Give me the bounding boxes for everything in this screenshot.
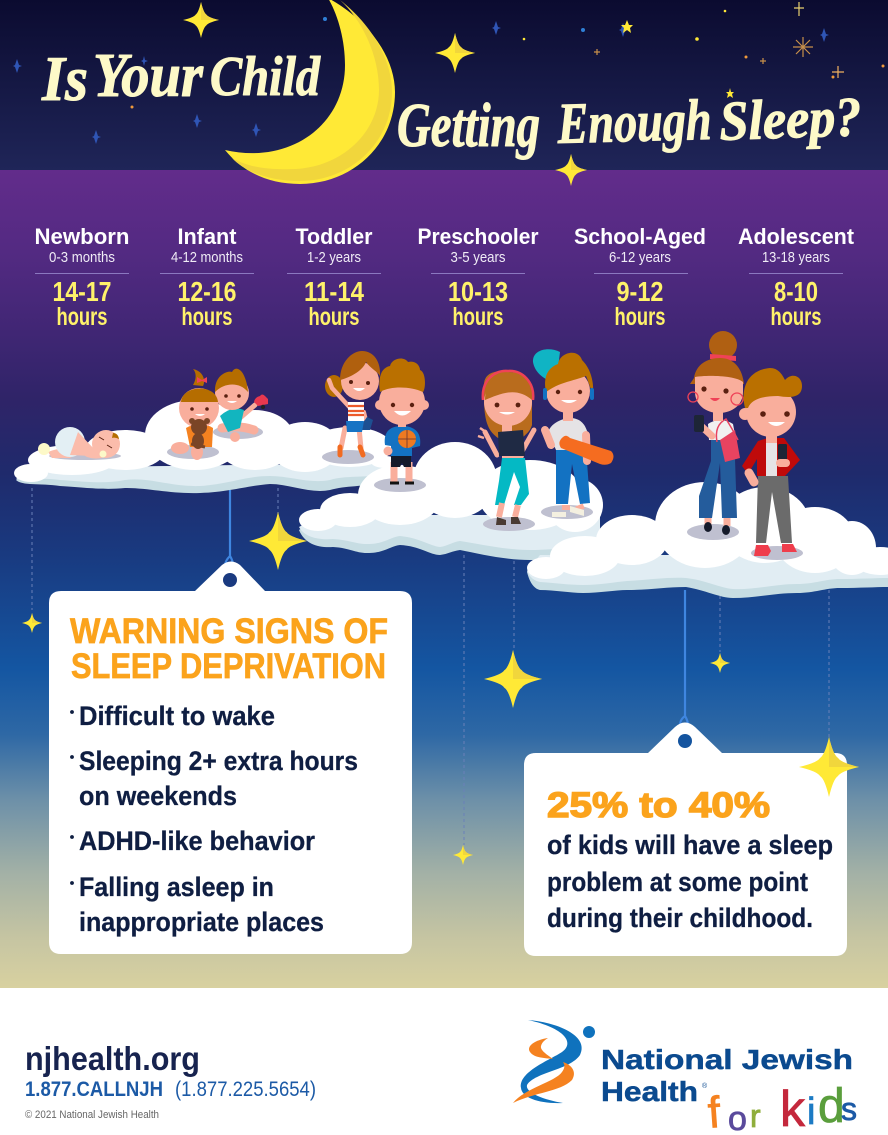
dashed hanging strings bbox=[32, 488, 829, 845]
star: on stat panel bbox=[799, 737, 859, 797]
child: infant boy with toy car bbox=[213, 369, 268, 442]
background: purple to sand gradient bbox=[0, 170, 888, 988]
logo mark bbox=[513, 1020, 595, 1103]
statistic number: 25% to 40% bbox=[547, 786, 770, 825]
age column: infant: 4-12 months bbox=[171, 249, 243, 266]
child: newborn bbox=[38, 427, 121, 460]
age column: adolescent: hours bbox=[770, 303, 822, 331]
age column: infant: hours bbox=[182, 303, 232, 331]
title bbox=[41, 42, 862, 160]
teen: adolescent girl with bag bbox=[687, 331, 744, 540]
age column: school-aged: School-Aged bbox=[574, 224, 706, 249]
cloud 3 bbox=[527, 482, 888, 598]
logo for kids: d bbox=[818, 1080, 845, 1133]
age column: newborn: Newborn bbox=[34, 224, 130, 249]
logo: National Jewish Health for kids bbox=[513, 1020, 857, 1135]
title: Child bbox=[210, 46, 321, 108]
warning signs list bbox=[70, 701, 358, 937]
title: Getting bbox=[397, 92, 540, 160]
logo wordmark: ® bbox=[702, 1082, 708, 1090]
age column: school-aged: 9-12 bbox=[616, 276, 664, 307]
warning signs list: ADHD-like behavior bbox=[79, 826, 315, 856]
star: on horizon bbox=[555, 154, 587, 186]
warning heading bbox=[70, 612, 388, 686]
statistic text: problem at some point bbox=[547, 867, 808, 897]
age column: infant: 12-16 bbox=[178, 276, 236, 307]
child: preschooler boy with skateboard bbox=[533, 349, 614, 519]
age column: school-aged: 6-12 years bbox=[609, 249, 671, 266]
age column: toddler: 11-14 bbox=[304, 276, 364, 307]
warning heading: SLEEP DEPRIVATION bbox=[71, 647, 386, 686]
footer contact: © 2021 National Jewish Health bbox=[25, 1109, 159, 1121]
age column: preschooler: Preschooler bbox=[418, 224, 539, 249]
cloud 1 bbox=[14, 400, 399, 493]
logo for kids: i bbox=[807, 1091, 815, 1133]
title: Enough bbox=[556, 87, 712, 156]
panel: statistic bbox=[524, 722, 847, 956]
statistic text bbox=[547, 830, 833, 933]
star: between clouds bbox=[249, 512, 307, 570]
star: small left bbox=[22, 613, 42, 633]
age column: preschooler: 3-5 years bbox=[450, 249, 506, 266]
child: toddler girl bbox=[322, 351, 380, 464]
panel: warning signs bbox=[49, 562, 412, 954]
age column: adolescent: 13-18 years bbox=[762, 249, 830, 266]
footer contact bbox=[25, 1040, 316, 1121]
small background stars bbox=[13, 2, 884, 144]
logo wordmark bbox=[601, 1044, 853, 1107]
age column: toddler: hours bbox=[308, 303, 360, 331]
logo for kids: r bbox=[750, 1098, 761, 1134]
age column: toddler: 1-2 years bbox=[307, 249, 361, 266]
age column: toddler bbox=[287, 224, 381, 331]
warning signs list: inappropriate places bbox=[79, 907, 324, 937]
warning signs list: Sleeping 2+ extra hours bbox=[79, 746, 358, 776]
age column: preschooler: 10-13 bbox=[448, 276, 508, 307]
logo wordmark: National Jewish bbox=[601, 1044, 853, 1075]
hanging string right bbox=[680, 590, 688, 740]
age column: infant bbox=[160, 224, 254, 331]
age column: newborn bbox=[34, 224, 130, 331]
logo for kids: s bbox=[841, 1091, 857, 1127]
age column: toddler: Toddler bbox=[296, 224, 373, 249]
tag hole right bbox=[678, 734, 692, 748]
moon bbox=[225, 0, 395, 184]
footer contact: njhealth.org bbox=[25, 1040, 200, 1077]
age column: school-aged bbox=[574, 224, 706, 331]
age column: newborn: 0-3 months bbox=[49, 249, 115, 266]
logo wordmark: Health bbox=[601, 1076, 698, 1107]
statistic text: during their childhood. bbox=[547, 903, 813, 933]
hanging string left bbox=[225, 490, 233, 580]
warning signs list: on weekends bbox=[79, 781, 237, 811]
warning signs list: Difficult to wake bbox=[79, 701, 275, 731]
child: preschooler girl with headphones bbox=[478, 371, 535, 531]
footer bbox=[0, 988, 888, 1135]
logo for kids bbox=[706, 1080, 857, 1135]
age column: adolescent: Adolescent bbox=[738, 224, 855, 249]
star: moon top bbox=[183, 2, 219, 38]
age column: adolescent: 8-10 bbox=[774, 276, 818, 307]
age column: newborn: hours bbox=[56, 303, 108, 331]
age column: preschooler: hours bbox=[452, 303, 504, 331]
cloud 2 bbox=[299, 442, 603, 560]
title: Is bbox=[41, 43, 88, 114]
warning signs list: Falling asleep in bbox=[79, 872, 274, 902]
statistic text: of kids will have a sleep bbox=[547, 830, 833, 860]
child: toddler boy with basketball bbox=[374, 359, 429, 492]
age column: school-aged: hours bbox=[614, 303, 666, 331]
child: infant girl with teddy bbox=[167, 369, 219, 460]
age column: newborn: 14-17 bbox=[52, 276, 112, 307]
star: right of moon bbox=[435, 33, 475, 73]
teen: adolescent boy with phone bbox=[739, 368, 803, 560]
title: Your bbox=[93, 42, 204, 110]
star: small right bbox=[710, 653, 730, 673]
age column: infant: Infant bbox=[178, 224, 237, 249]
title: Sleep? bbox=[718, 86, 862, 153]
star: small lower bbox=[453, 845, 473, 865]
footer contact: 1.877.CALLNJH bbox=[25, 1078, 163, 1101]
background: night sky bbox=[0, 0, 888, 170]
tag hole left bbox=[223, 573, 237, 587]
age column: adolescent bbox=[738, 224, 855, 331]
star: middle bbox=[484, 650, 542, 708]
age column: preschooler bbox=[418, 224, 539, 331]
footer contact: (1.877.225.5654) bbox=[175, 1078, 316, 1101]
warning heading: WARNING SIGNS OF bbox=[70, 612, 388, 651]
